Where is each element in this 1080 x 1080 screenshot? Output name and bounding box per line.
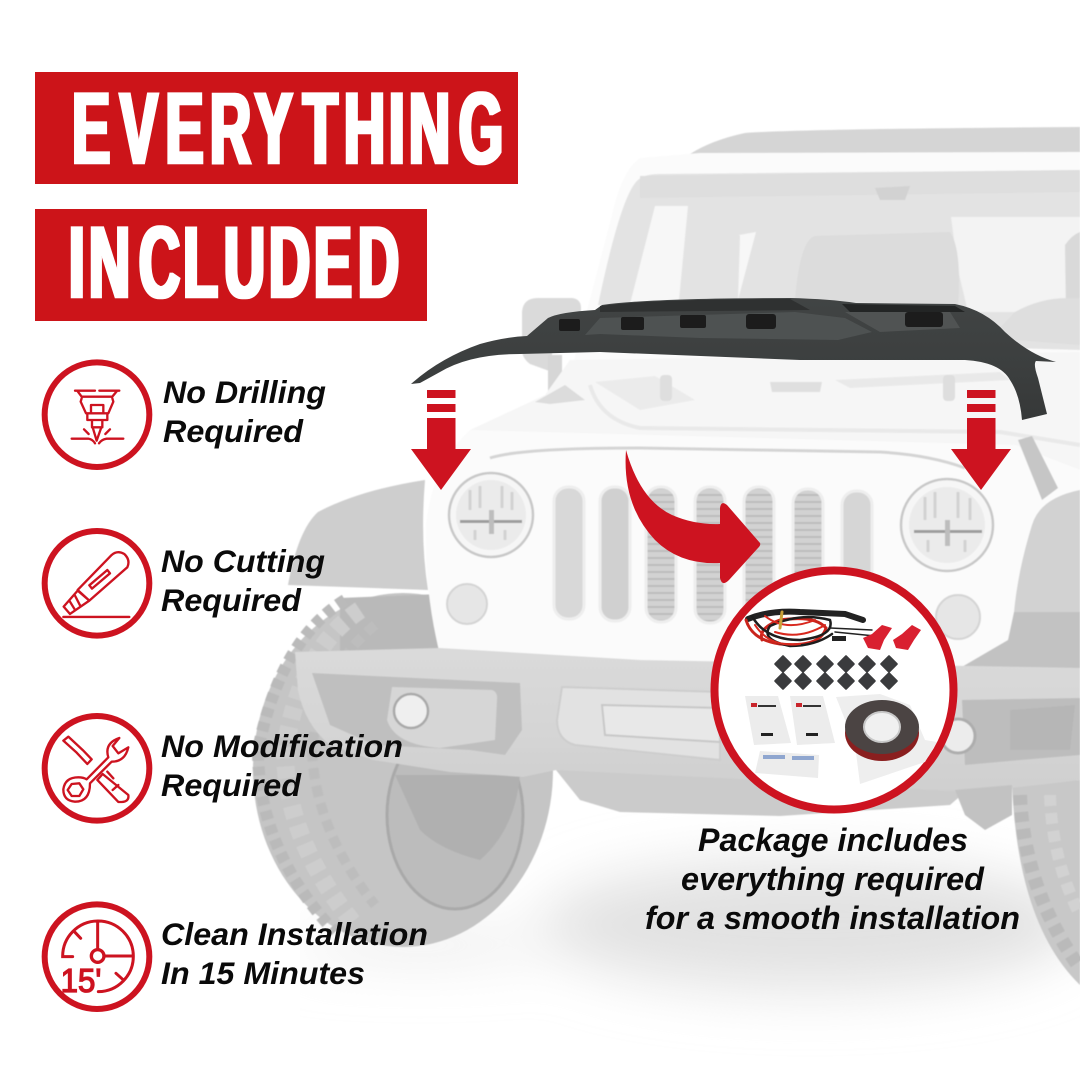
wiring harness — [746, 612, 875, 646]
background: greyed-out jeep photo — [253, 127, 1080, 985]
right bumper insert — [962, 698, 1080, 765]
suspension below bumper — [955, 785, 1012, 830]
windshield glass — [598, 170, 1080, 350]
text: clean installation in 15 minutes: In 15 Minutes — [161, 955, 365, 991]
hood — [470, 352, 1080, 470]
left tire — [253, 593, 553, 947]
icon: crossed wrench and screwdriver — [45, 716, 149, 821]
product: hood visor — [411, 298, 1056, 420]
text: clean installation in 15 minutes: Clean Installation — [161, 916, 428, 952]
icon: drill — [45, 362, 149, 467]
arrow: curved to package — [626, 450, 760, 583]
arrow: right down — [951, 390, 1011, 490]
text: no drilling required: Required — [163, 413, 304, 449]
red connectors — [863, 625, 921, 650]
grille slots — [554, 487, 872, 625]
banner: everything: EVERYTHING — [72, 71, 503, 186]
text: no drilling required: No Drilling — [163, 374, 326, 410]
center plate — [557, 687, 720, 760]
headlights — [449, 473, 993, 571]
skid plate — [556, 770, 965, 816]
icon: utility knife — [45, 531, 149, 636]
title — [35, 71, 518, 321]
feature: no modification — [45, 716, 403, 821]
right fender — [1014, 490, 1080, 612]
text: no cutting required: Required — [161, 582, 302, 618]
ground shadow — [290, 860, 1080, 990]
caption: package includes: everything required — [681, 861, 985, 897]
visor light vents — [559, 312, 943, 331]
text: no modification required: No Modification — [161, 728, 403, 764]
icon: 15 minute clock — [45, 904, 149, 1009]
caption: package includes: Package includes — [698, 822, 968, 858]
alcohol pads — [755, 751, 819, 778]
grille panel — [426, 430, 1080, 668]
foam tape roll — [836, 694, 937, 784]
soft top roof — [690, 127, 1080, 154]
text: no cutting required: No Cutting — [161, 543, 325, 579]
arrow: left down — [411, 390, 471, 490]
hinge latch — [1018, 436, 1058, 500]
caption: package includes: for a smooth installation — [645, 900, 1020, 936]
turn signals — [447, 584, 487, 624]
feature: clean installation — [45, 904, 428, 1009]
windshield frame — [572, 152, 1080, 368]
adhesive clips — [774, 655, 898, 690]
left fender — [288, 480, 428, 590]
left mirror — [522, 298, 581, 372]
text: no modification required: Required — [161, 767, 302, 803]
banner: included: INCLUDED — [69, 205, 399, 320]
feature: no cutting — [45, 531, 325, 636]
feature: no drilling — [45, 362, 326, 467]
bumper — [295, 648, 1080, 816]
fog light insert — [312, 673, 522, 755]
icon: 15 minute clock: 15' — [61, 963, 101, 1000]
primer packets — [745, 696, 835, 745]
underbody right — [960, 612, 1080, 670]
right tire — [1012, 780, 1080, 985]
package contents circle — [714, 570, 954, 810]
